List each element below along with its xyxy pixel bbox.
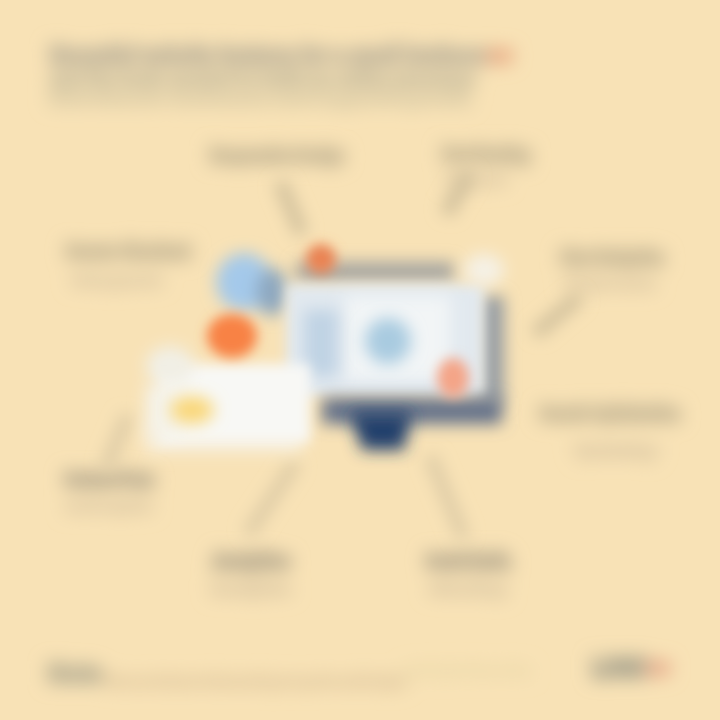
connector: bottom left <box>106 415 128 468</box>
footer logo: LOGO <box>592 652 648 683</box>
monitor top bar <box>296 262 454 282</box>
footer text <box>48 658 530 689</box>
label: right: Simple menus <box>565 275 655 291</box>
central illustration <box>146 244 504 452</box>
label: right <box>560 247 664 291</box>
yellow oval <box>170 396 214 424</box>
label: bottom right <box>426 550 510 598</box>
connector: bottom center <box>248 462 296 534</box>
label: top center: Responsive Design <box>210 145 344 167</box>
label: bottom left: Lead capture <box>66 498 152 515</box>
label: right lower <box>540 403 680 459</box>
monitor base <box>322 398 502 424</box>
label: top right <box>442 144 530 187</box>
monitor screen <box>286 284 484 396</box>
footer logo: co <box>648 654 670 681</box>
label: bottom center: Insights <box>212 581 290 598</box>
connector: top right <box>446 172 470 214</box>
label: bottom left: Contact Form <box>64 469 154 491</box>
label: bottom left <box>64 469 154 515</box>
monitor right bezel <box>480 296 504 404</box>
label: bottom right: Social Media <box>426 550 510 573</box>
title: that attracts customers and supports growth <box>50 91 470 108</box>
label: bottom right: Sharing <box>430 581 506 598</box>
connector: bottom right <box>430 456 464 538</box>
pink badge <box>437 358 469 398</box>
monitor <box>286 254 504 450</box>
corner highlight <box>464 254 504 286</box>
label: top right: Fast Hosting <box>442 144 530 166</box>
icon: blue circle <box>216 253 288 316</box>
connector: right <box>535 296 580 334</box>
footer text: Note <box>48 658 102 688</box>
chart circle on screen <box>365 318 411 364</box>
footer text: and review them often <box>405 662 530 678</box>
connector: top center <box>280 182 302 234</box>
title: and the tools needed to build an online presence <box>50 66 475 91</box>
label: right lower: Visibility <box>575 443 657 459</box>
label: right: Clear Navigation <box>560 247 664 269</box>
monitor stand <box>350 412 412 450</box>
screen highlight <box>345 296 450 380</box>
icon: orange circle large <box>207 314 257 358</box>
label: left <box>66 241 190 288</box>
title <box>50 42 512 108</box>
label: left: Secure Checkout <box>66 241 190 263</box>
label: bottom center: Analytics <box>212 550 290 573</box>
chart bar on screen <box>304 310 338 376</box>
title: ss <box>488 42 512 67</box>
label: top right: Page speed <box>446 172 506 187</box>
label: left: Safe payments <box>72 272 162 288</box>
label: bottom center <box>212 550 290 598</box>
document card <box>146 346 310 452</box>
footer text: Choose features that match your goals and budget <box>105 673 405 689</box>
icon: orange circle top <box>306 244 336 274</box>
title: Essential website features for a small business <box>50 42 490 69</box>
